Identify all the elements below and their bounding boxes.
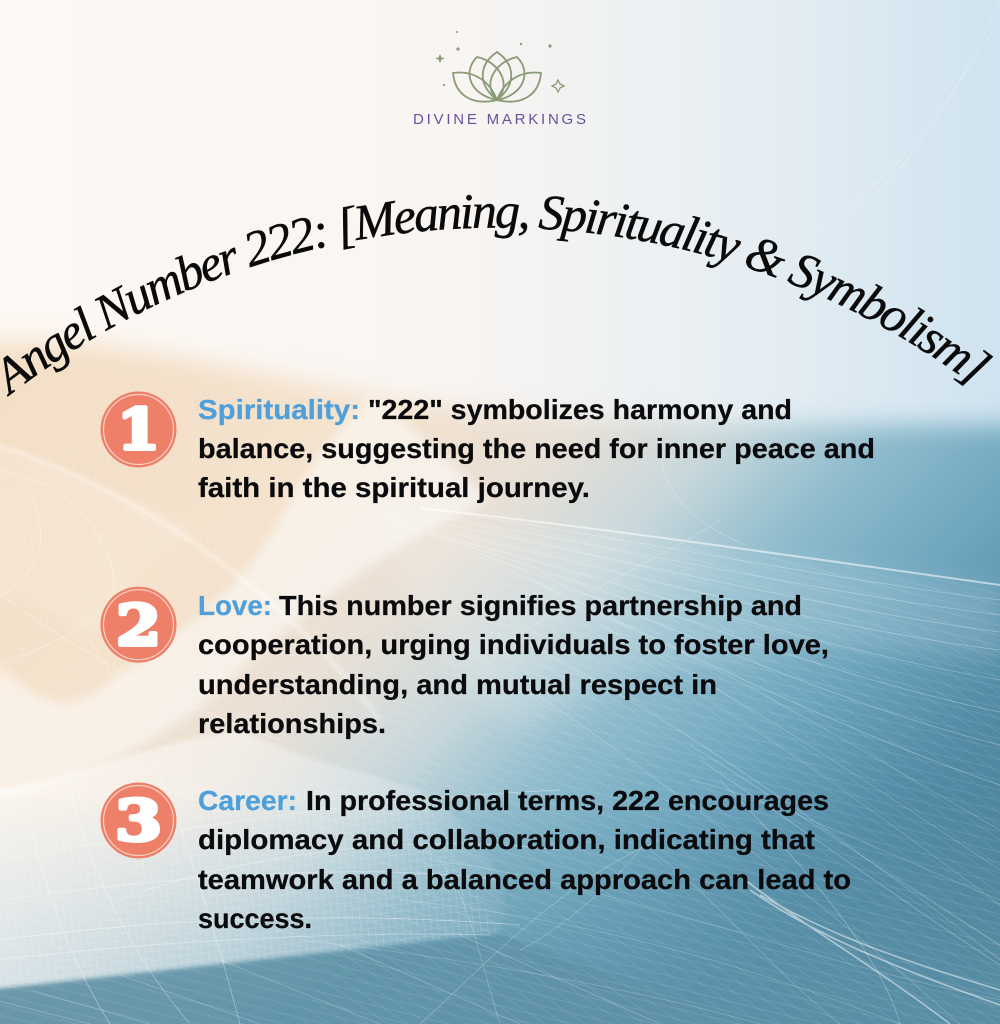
- text block: spirituality: faith in the spiritual journey.: [198, 472, 590, 503]
- text block: love: [198, 590, 829, 739]
- text block: spirituality: "222" symbolizes harmony and: [368, 394, 792, 425]
- item 1: spirituality: [100, 392, 875, 503]
- background ribbon: left veil: [0, 445, 200, 640]
- text block: career: success.: [198, 903, 312, 934]
- icon: sparkles and dots: [435, 31, 564, 92]
- background: fine mesh texture: [0, 500, 1000, 1024]
- background ribbon: bright wedge: [0, 395, 490, 800]
- badge: number 3: 3: [115, 787, 162, 854]
- badge: number 2: [100, 587, 176, 663]
- text block: career: teamwork and a balanced approach can lead to: [198, 864, 851, 895]
- text block: spirituality: Spirituality:: [198, 394, 360, 425]
- badge: number 1: 1: [117, 397, 160, 462]
- text block: love: This number signifies partnership and: [279, 590, 802, 621]
- text block: career: [198, 785, 851, 934]
- logo: Divine Markings: [413, 31, 586, 128]
- icon: lotus: [453, 52, 541, 102]
- title: curved heading: Angel Number 222: [Meaning, Spirituality & Symbolism]: [3, 194, 994, 397]
- badge: number 1: [100, 392, 176, 468]
- text block: spirituality: balance, suggesting the need for inner peace and: [198, 433, 875, 464]
- brand name: DIVINE MARKINGS: [413, 111, 586, 128]
- item 3: career: [100, 782, 851, 934]
- text block: love: understanding, and mutual respect in: [198, 669, 717, 700]
- text block: love: cooperation, urging individuals to foster love,: [198, 629, 829, 660]
- item 2: love: [100, 587, 829, 739]
- badge: number 3: [100, 782, 176, 858]
- text block: love: Love:: [198, 590, 272, 621]
- text block: career: Career:: [198, 785, 297, 816]
- background ribbon: bottom-left teal strip: [0, 934, 760, 1024]
- text block: spirituality: [198, 394, 875, 503]
- text block: career: In professional terms, 222 encourages: [306, 785, 829, 816]
- text block: love: relationships.: [198, 708, 386, 739]
- background ribbon: lower-left net: [0, 730, 505, 989]
- background ribbon: upper net band: [360, 505, 1000, 730]
- badge: number 2: 2: [116, 593, 161, 659]
- text block: career: diplomacy and collaboration, indicating that: [198, 824, 815, 855]
